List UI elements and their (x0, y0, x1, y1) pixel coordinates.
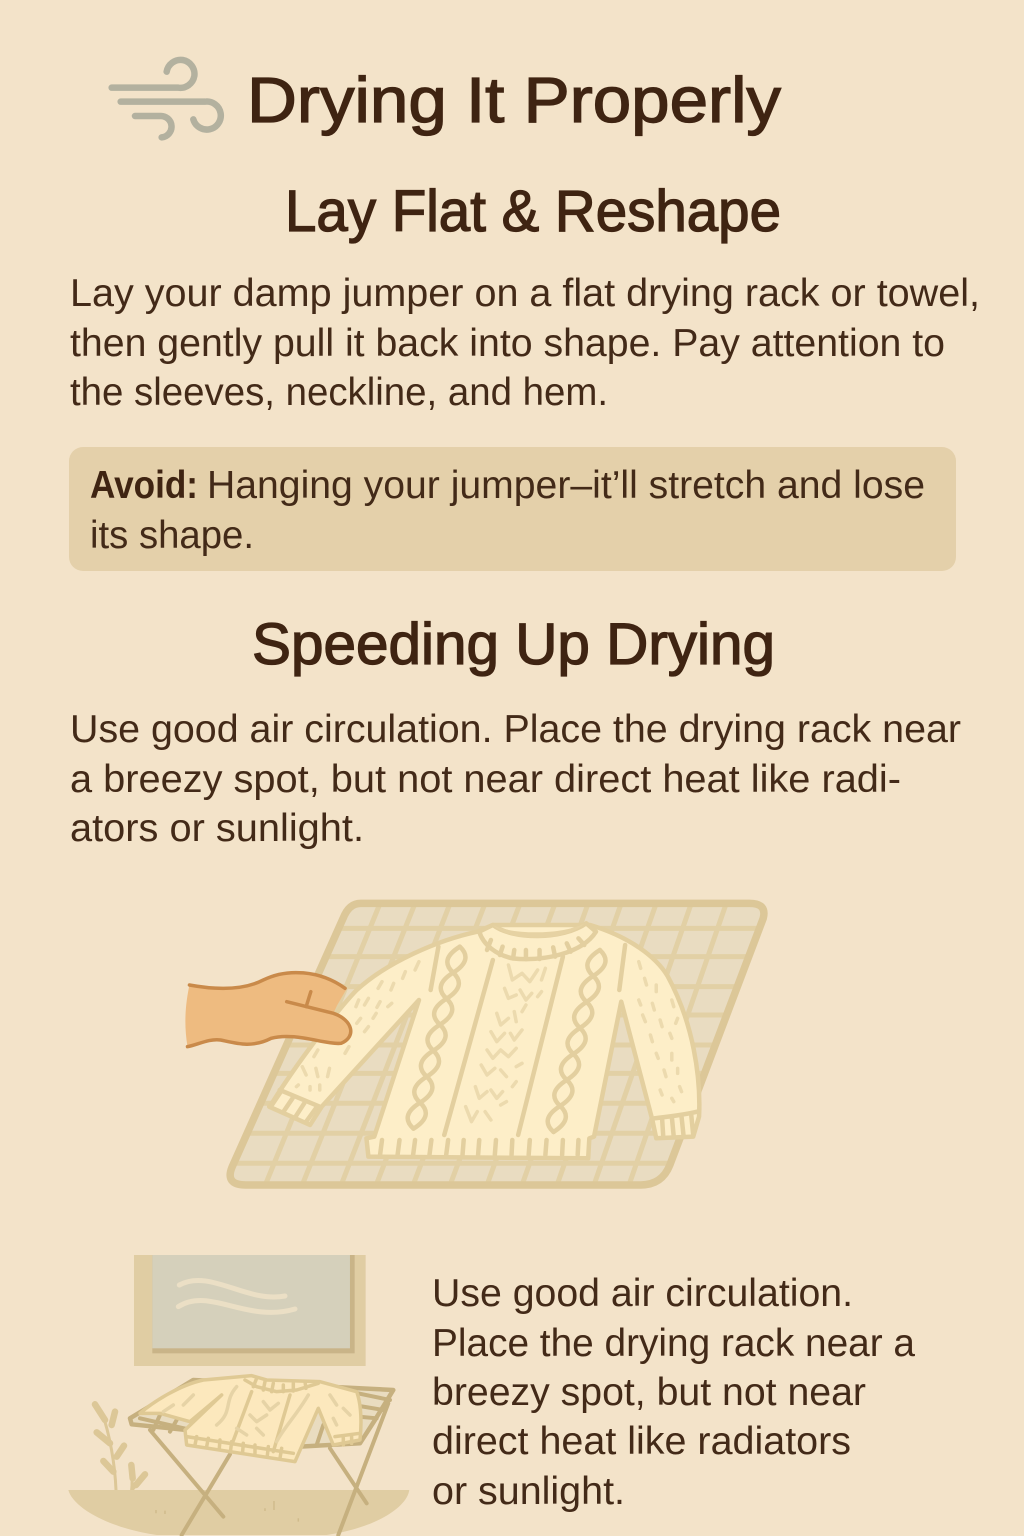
callout: avoid hanging: Avoid: (90, 464, 198, 507)
text block: lay flat instructions (70, 272, 980, 414)
icon: wind (112, 60, 221, 137)
text block: air circulation advice: or sunlight. (432, 1470, 625, 1513)
heading: lay flat and reshape: Lay Flat & Reshape (285, 179, 781, 244)
callout: avoid hanging (69, 447, 956, 571)
text block: lay flat instructions: then gently pull it back into shape. Pay attention to (70, 322, 945, 365)
drying rack (209, 903, 792, 1185)
plant (95, 1404, 145, 1490)
callout: avoid hanging: its shape. (90, 514, 254, 557)
folded jumper (140, 1376, 361, 1462)
callout: avoid hanging: Hanging your jumper–it’ll stretch and lose (207, 464, 925, 507)
floor (68, 1490, 409, 1535)
illustration: jumper on flat drying rack with hand (185, 903, 792, 1185)
text block: air circulation advice: Use good air circulation. (432, 1272, 853, 1315)
window (134, 1255, 366, 1366)
text block: lay flat instructions: Lay your damp jumper on a flat drying rack or towel, (70, 272, 980, 315)
cable knit strands (408, 947, 606, 1132)
rack frame and legs (130, 1380, 393, 1535)
text block: speeding up instructions: a breezy spot, but not near direct heat like radi- (70, 758, 901, 801)
jumper (269, 923, 699, 1158)
title: Drying It Properly (247, 64, 781, 136)
text block: lay flat instructions: the sleeves, neckline, and hem. (70, 371, 608, 414)
heading: speeding up drying: Speeding Up Drying (252, 612, 775, 677)
text block: air circulation advice: direct heat like radiators (432, 1420, 851, 1463)
text block: speeding up instructions: ators or sunlight. (70, 807, 364, 850)
text block: speeding up instructions: Use good air circulation. Place the drying rack near (70, 708, 961, 751)
hand (185, 973, 351, 1047)
text block: speeding up instructions (70, 708, 961, 850)
text block: air circulation advice: Place the drying rack near a (432, 1322, 915, 1365)
knit texture (296, 962, 682, 1122)
text block: air circulation advice: breezy spot, but not near (432, 1371, 866, 1414)
text block: air circulation advice (432, 1272, 915, 1513)
illustration: drying rack near breezy window (68, 1255, 409, 1535)
